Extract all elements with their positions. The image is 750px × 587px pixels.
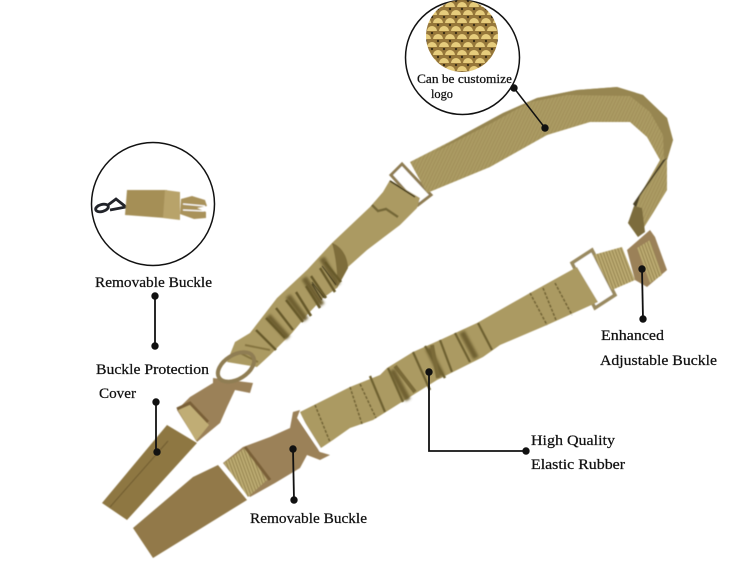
label: buckle protection cover: Buckle Protection	[96, 362, 210, 378]
label: removable buckle lower: Removable Buckle	[250, 511, 367, 527]
callout: buckle detail	[92, 142, 214, 266]
logo caption: logo	[431, 86, 453, 101]
upper webbing strap	[410, 87, 673, 237]
label: buckle protection cover: Cover	[99, 386, 136, 402]
triangle ring on upper strap	[391, 164, 431, 205]
label: removable buckle upper: Removable Buckle	[95, 275, 212, 291]
callout: customizable logo	[406, 0, 520, 114]
pointer: adjustable buckle	[638, 265, 647, 323]
label: enhanced adjustable buckle: Enhanced	[601, 328, 665, 344]
icon: small buckle	[125, 190, 207, 220]
pointer: logo to strap	[510, 84, 549, 132]
adjustable buckle	[593, 230, 667, 290]
pointer: upper left	[151, 292, 159, 350]
logo caption	[417, 71, 512, 101]
pointer: elastic rubber	[425, 368, 530, 455]
sling product illustration	[102, 87, 673, 558]
D ring and front buckle	[177, 346, 259, 442]
adjustable buckle ring	[572, 250, 615, 308]
label: enhanced adjustable buckle	[600, 328, 717, 369]
label: high quality elastic rubber: High Quality	[531, 433, 616, 449]
lower cover	[133, 465, 247, 558]
label: high quality elastic rubber	[531, 433, 625, 473]
pointer: removable buckle lower	[289, 445, 298, 504]
buckle protection cover	[102, 425, 197, 520]
fabric swatch	[426, 0, 498, 72]
pointer: cover	[152, 398, 161, 456]
label: buckle protection cover	[96, 362, 210, 402]
icon: snap hook	[95, 199, 126, 213]
lower release buckle	[223, 410, 330, 497]
upper elastic section	[227, 180, 420, 367]
label: high quality elastic rubber: Elastic Rubber	[531, 457, 625, 473]
logo caption: Can be customize	[417, 71, 512, 86]
lower elastic section	[300, 267, 598, 450]
label: enhanced adjustable buckle: Adjustable Buckle	[600, 353, 717, 369]
